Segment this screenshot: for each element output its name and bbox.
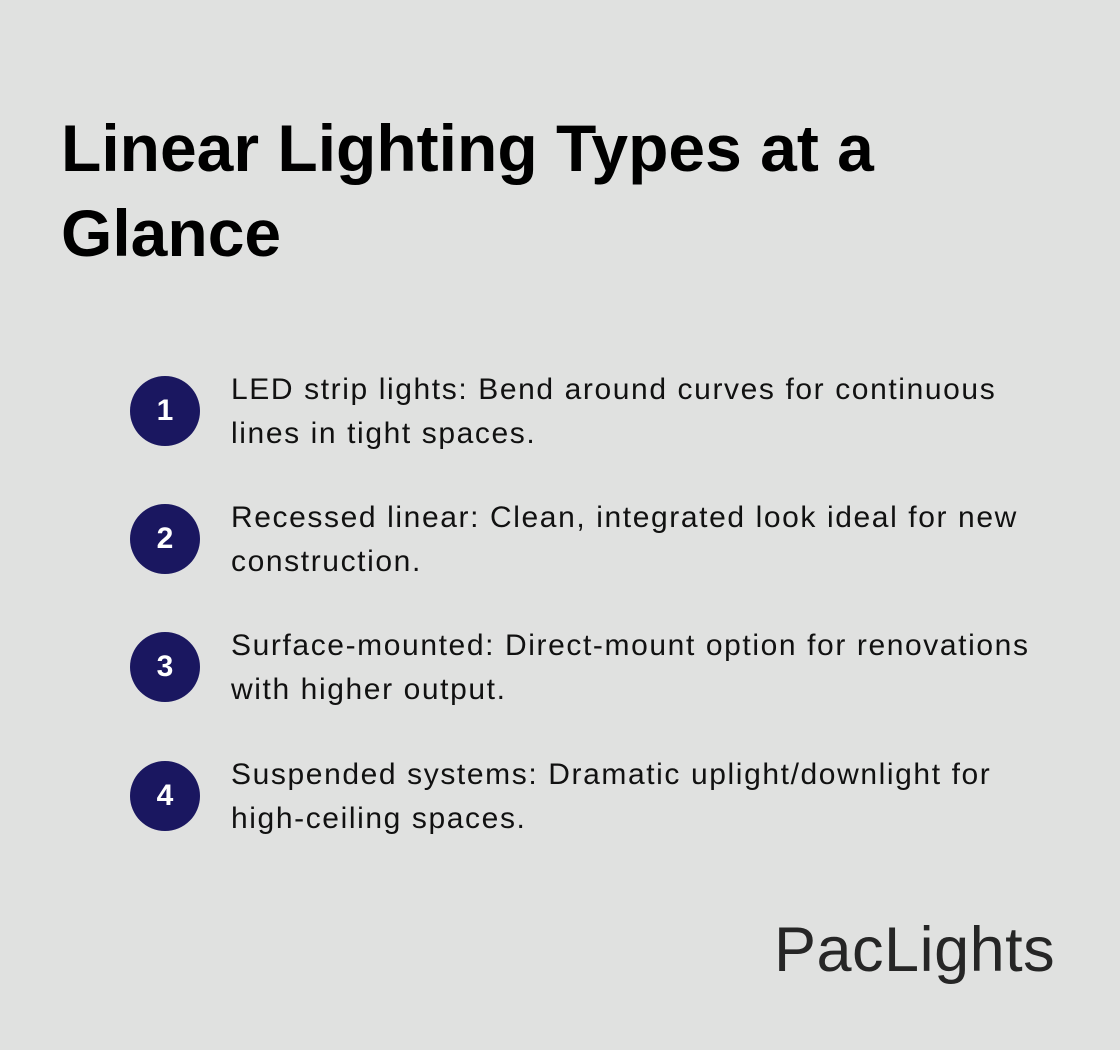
badge 3	[130, 632, 200, 702]
badge 1	[130, 376, 200, 446]
title: Linear Lighting Types at a	[61, 111, 874, 185]
text 4	[231, 758, 991, 835]
text 1: LED strip lights: Bend around curves for continuous	[231, 373, 996, 406]
badge 3: 3	[157, 650, 173, 683]
text 3	[231, 629, 1030, 706]
badge 2	[130, 504, 200, 574]
text 3: Surface-mounted: Direct-mount option for renovations	[231, 629, 1030, 662]
badge 2: 2	[157, 522, 173, 555]
text 2: construction.	[231, 545, 422, 578]
title: Glance	[61, 196, 281, 270]
text 1: lines in tight spaces.	[231, 417, 536, 450]
text 3: with higher output.	[231, 673, 507, 706]
badge 4: 4	[157, 779, 173, 812]
item 2	[130, 501, 1018, 578]
badge 4	[130, 761, 200, 831]
text 2	[231, 501, 1018, 578]
item 3	[130, 629, 1030, 706]
text 1	[231, 373, 996, 450]
item 4	[130, 758, 991, 835]
title	[61, 111, 874, 270]
text 4: Suspended systems: Dramatic uplight/downlight for	[231, 758, 991, 791]
badge 1: 1	[157, 394, 173, 427]
text 2: Recessed linear: Clean, integrated look ideal for new	[231, 501, 1018, 534]
logo: PacLights	[774, 915, 1055, 985]
text 4: high-ceiling spaces.	[231, 802, 526, 835]
item 1	[130, 373, 996, 450]
